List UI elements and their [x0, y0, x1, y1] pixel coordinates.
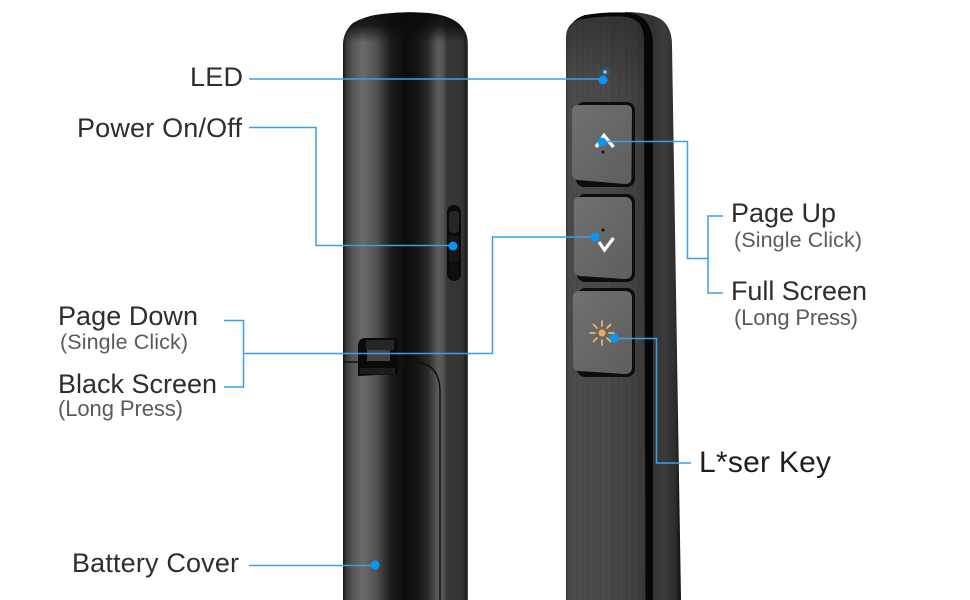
- callout: Page Up and Full Screen: (Long Press): [734, 305, 858, 330]
- remote face: [566, 16, 646, 600]
- callout: Page Up and Full Screen: Page Up: [731, 198, 836, 228]
- black strip: [566, 12, 653, 600]
- page up button: [572, 102, 635, 187]
- callout: Page Down and Black Screen: [58, 232, 600, 421]
- callout: Page Up and Full Screen: Full Screen: [731, 276, 867, 306]
- callout: Page Down and Black Screen: Page Down: [58, 301, 198, 331]
- callout: Page Up and Full Screen: (Single Click): [734, 228, 862, 252]
- callout: Laser Key: L*ser Key: [699, 446, 831, 479]
- brushed texture: [572, 20, 638, 600]
- callout: Battery Cover: [72, 548, 380, 578]
- down arrow icon: [599, 238, 614, 250]
- up arrow icon: [596, 136, 614, 147]
- callout: Page Down and Black Screen: (Single Click): [60, 330, 188, 354]
- battery cover seam: [343, 362, 440, 600]
- callout: Battery Cover: Battery Cover: [72, 548, 239, 578]
- right remote: front view: [566, 12, 681, 600]
- callout: Power On/Off: Power On/Off: [77, 113, 242, 143]
- callout: Page Down and Black Screen: Black Screen: [58, 369, 217, 399]
- LED indicator: [602, 68, 608, 76]
- page down button: [574, 194, 635, 282]
- laser burst icon: [590, 321, 614, 345]
- callout: Page Up and Full Screen: [598, 138, 867, 330]
- callout: Power On/Off: [77, 113, 458, 250]
- laser button: [573, 288, 635, 377]
- callout: LED: LED: [190, 62, 243, 92]
- callout: LED: [190, 62, 608, 92]
- callout: Page Down and Black Screen: (Long Press): [58, 396, 183, 421]
- remote body: [343, 12, 468, 600]
- callout: Laser Key: [610, 334, 831, 479]
- battery cover latch: [358, 338, 398, 376]
- left remote: back view: [343, 12, 468, 600]
- remote side panel: [625, 12, 681, 600]
- power slide switch: [447, 205, 461, 281]
